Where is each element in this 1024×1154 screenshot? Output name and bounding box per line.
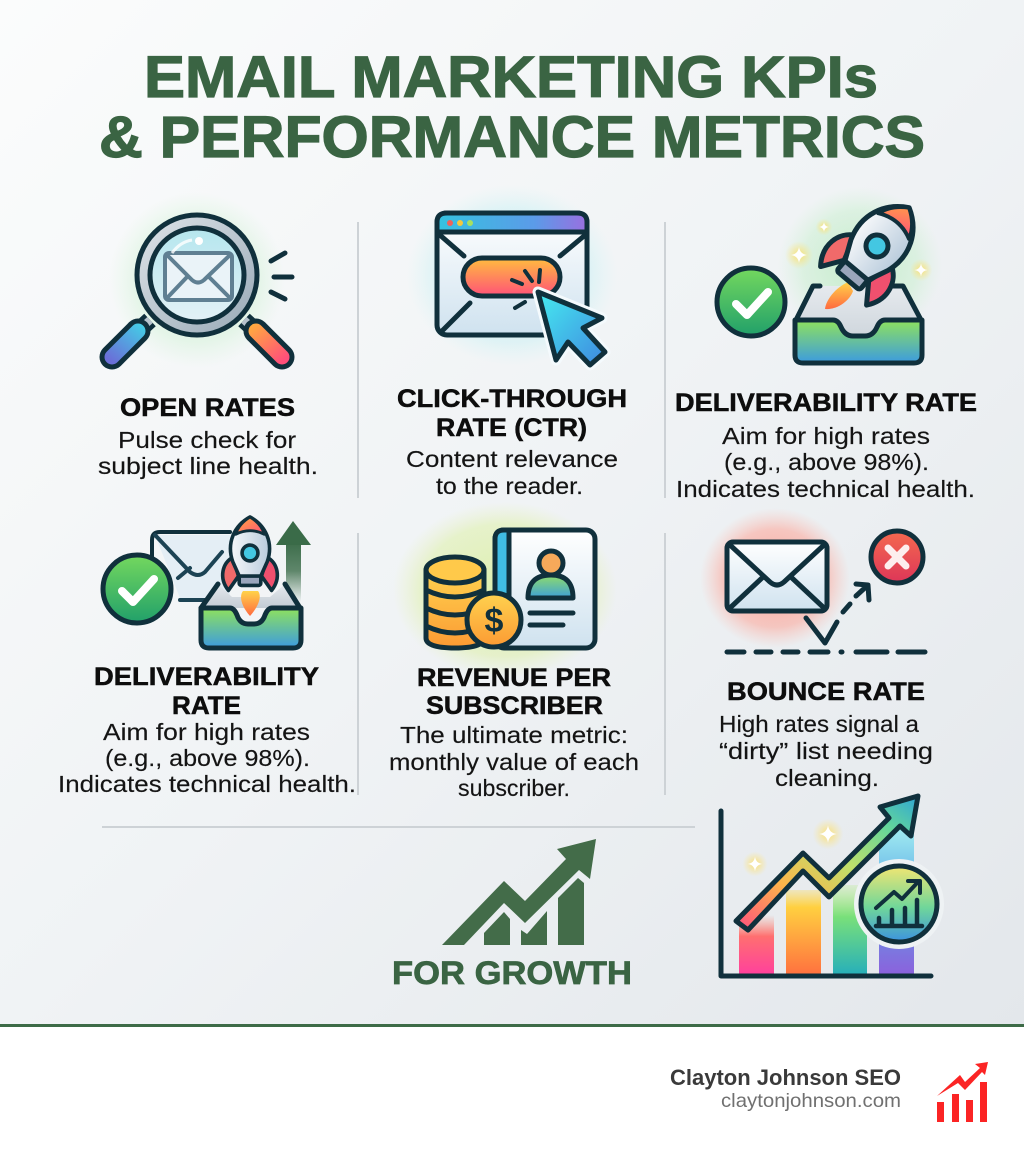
description: “dirty” list needing (719, 738, 933, 764)
description: to the reader. (436, 473, 583, 499)
description: subject line health. (98, 453, 318, 479)
description (676, 423, 975, 502)
icon: email window with button and cursor (407, 185, 617, 365)
description (406, 446, 618, 499)
title: EMAIL MARKETING KPIs (144, 45, 878, 110)
description: Indicates technical health. (676, 476, 975, 502)
icon: coins and subscriber card (393, 502, 617, 678)
icon: bounced envelope with error badge (700, 508, 925, 652)
panel: deliverability rate (bottom) (58, 517, 356, 797)
description: The ultimate metric: (400, 722, 628, 748)
title: & PERFORMANCE METRICS (99, 105, 925, 170)
heading: SUBSCRIBER (426, 692, 603, 720)
heading: OPEN RATES (120, 394, 295, 422)
description: Pulse check for (118, 427, 296, 453)
icon: coins and subscriber card: $ (485, 602, 504, 640)
chart: rising colourful bars (721, 796, 944, 976)
heading (94, 663, 319, 720)
description (719, 711, 933, 791)
description: High rates signal a (719, 711, 919, 737)
panel: bounce rate (700, 508, 933, 791)
heading: RATE (CTR) (436, 414, 587, 442)
description: cleaning. (775, 765, 879, 791)
description: monthly value of each (389, 749, 639, 775)
heading: RATE (172, 692, 241, 720)
icon: green growth arrow with bars (442, 839, 596, 945)
description: Aim for high rates (722, 423, 930, 449)
description (389, 722, 639, 801)
panel: revenue per subscriber (389, 502, 639, 801)
description: Indicates technical health. (58, 771, 356, 797)
footer brand text: claytonjohnson.com (721, 1090, 901, 1112)
heading: BOUNCE RATE (727, 678, 925, 706)
heading: DELIVERABILITY (94, 663, 319, 691)
heading: CLICK-THROUGH (397, 385, 627, 413)
footer band (0, 1024, 1024, 1027)
heading (397, 385, 627, 442)
panel: click-through rate (397, 185, 627, 499)
description: subscriber. (458, 775, 570, 801)
icon: rocket, envelope, check and up arrow (103, 517, 311, 648)
description: (e.g., above 98%). (724, 449, 929, 475)
title (99, 45, 925, 170)
footer brand text: Clayton Johnson SEO (670, 1065, 901, 1090)
icon: brand logo (937, 1062, 988, 1122)
description (58, 719, 356, 797)
heading: DELIVERABILITY RATE (675, 389, 977, 417)
description: Content relevance (406, 446, 618, 472)
footer brand text (670, 1065, 901, 1112)
icon: magnifying glass over envelope (109, 192, 292, 368)
description: (e.g., above 98%). (105, 745, 310, 771)
heading: REVENUE PER (417, 664, 611, 692)
panel: open rates (98, 192, 318, 479)
description: Aim for high rates (103, 719, 310, 745)
icon: rocket leaving inbox tray with check (717, 183, 942, 363)
label: for growth: FOR GROWTH (392, 955, 632, 991)
panel: deliverability rate (top) (675, 183, 977, 502)
heading (417, 664, 611, 720)
description (98, 427, 318, 479)
